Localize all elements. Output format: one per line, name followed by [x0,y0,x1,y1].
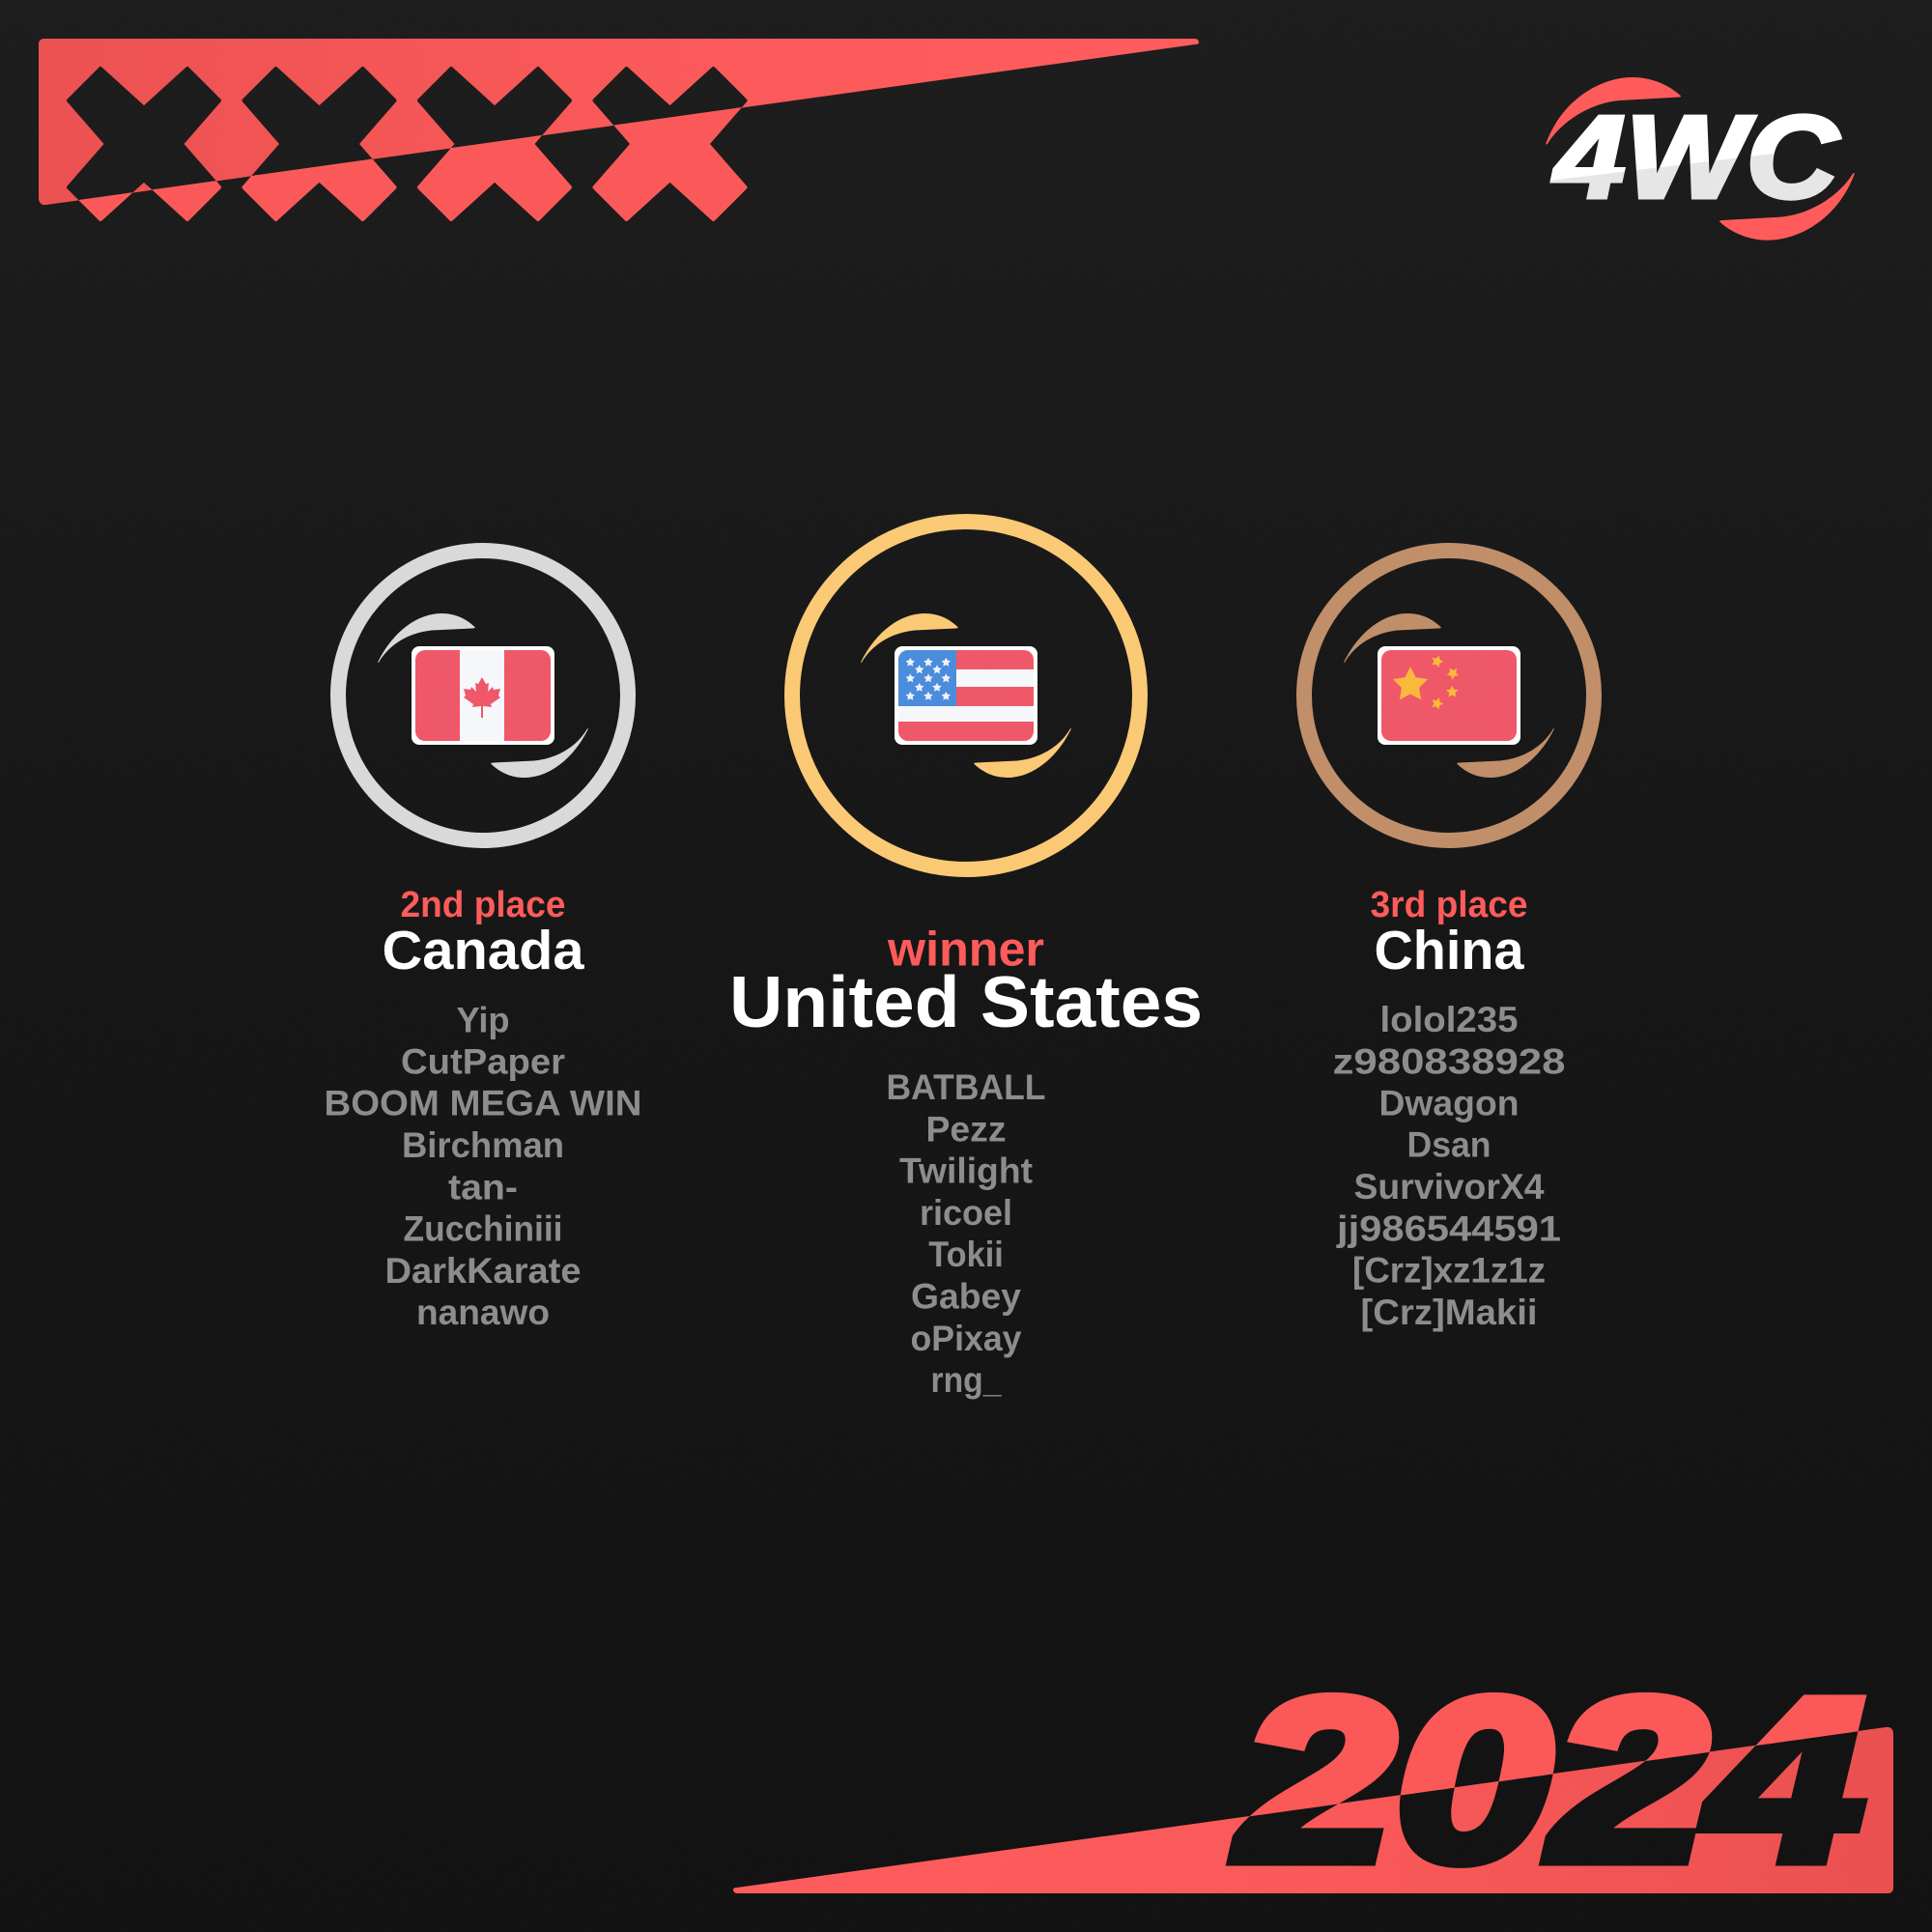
medal: Canada silver [338,551,628,840]
player list: BATBALL [887,1067,1045,1107]
swoosh bottom [491,728,588,778]
flag: China [1378,646,1520,745]
player list [325,1001,641,1332]
player list: BOOM MEGA WIN [325,1084,641,1123]
swoosh bottom [1457,728,1554,778]
swoosh top [1344,613,1441,663]
bottom banner with year [733,1692,1893,1893]
player list: ricoel [920,1193,1012,1233]
placement label: winner [887,922,1044,976]
player list [1333,1000,1565,1332]
player list [887,1067,1045,1400]
4WC logo [1546,77,1855,241]
player list: SurvivorX4 [1354,1167,1545,1207]
player list: rng_ [931,1360,1002,1400]
country name: China [1374,920,1525,981]
player list: Birchman [402,1125,564,1165]
player list: Yip [456,1001,510,1039]
player list: [Crz]Makii [1360,1293,1538,1332]
flag: Canada [412,646,554,745]
banner wedge [39,39,1199,205]
player list: tan- [448,1167,518,1208]
swoosh bottom [974,728,1071,778]
swoosh top [861,613,958,663]
player list: Dsan [1406,1125,1492,1165]
column: United States [729,922,1203,1400]
placement label: 2nd place [400,885,566,925]
player list: lolol235 [1379,1000,1519,1039]
player list: DarkKarate [384,1251,582,1291]
logo swoosh bottom [1719,173,1855,241]
flag: United States [895,646,1037,745]
inverted X marks [78,107,748,222]
banner wedge [733,1727,1893,1893]
player list: Dwagon [1379,1084,1519,1122]
player list: nanawo [416,1293,550,1332]
top banner with XXXX mark [39,39,1199,219]
silver ring [338,551,628,840]
player list: oPixay [910,1319,1022,1358]
medal: United States gold [792,522,1140,869]
player list: [Crz]xz1z1z [1352,1250,1546,1291]
country name: Canada [383,920,585,981]
player list: CutPaper [401,1041,565,1082]
player list: Gabey [911,1277,1021,1316]
player list: Tokii [928,1235,1004,1274]
column: China [1333,885,1565,1332]
player list: jj986544591 [1336,1209,1561,1248]
player list: z980838928 [1333,1041,1565,1082]
logo swoosh top [1546,77,1681,144]
player list: Twilight [899,1151,1033,1191]
medal: China bronze [1304,551,1594,840]
logo wordmark: 4WC [1551,91,1840,222]
player list: Pezz [925,1109,1007,1149]
gold ring [792,522,1140,869]
country name: United States [729,961,1203,1042]
year 2024: 2024 [1234,1650,1864,1909]
column: Canada [325,885,641,1332]
placement label: 3rd place [1370,885,1528,925]
bronze ring [1304,551,1594,840]
player list: Zucchiniii [404,1209,562,1248]
swoosh top [378,613,475,663]
